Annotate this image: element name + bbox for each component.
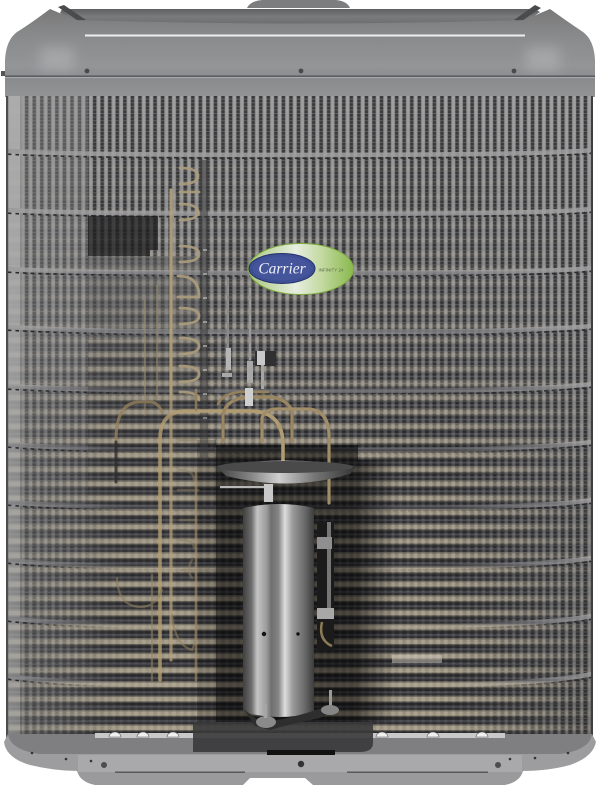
screws xyxy=(85,69,89,73)
horizontal bands xyxy=(8,150,592,686)
tagline: INFINITY 24 xyxy=(319,268,344,272)
blue oval xyxy=(249,254,315,284)
green oval xyxy=(248,244,354,294)
top cover xyxy=(1,0,595,97)
faint coil stripes over pipework xyxy=(100,400,215,700)
refrigerant pipework xyxy=(116,168,329,680)
cap body xyxy=(5,9,595,97)
compressor pan xyxy=(193,722,373,752)
hairpin coil column xyxy=(178,168,199,412)
foot rail xyxy=(77,771,523,785)
vertical tall pipe xyxy=(169,190,173,660)
tray floor xyxy=(8,734,592,754)
main copper loop xyxy=(160,411,283,680)
side rails xyxy=(6,96,8,744)
top lid xyxy=(60,9,540,24)
compressor feet xyxy=(243,708,332,730)
mounting plate xyxy=(216,460,356,484)
base xyxy=(4,690,596,785)
accumulator xyxy=(317,522,334,650)
vent cap xyxy=(247,0,350,8)
Carrier logo badge xyxy=(248,244,354,294)
drain notches xyxy=(109,732,488,737)
secondary loops xyxy=(116,402,162,440)
dark control box xyxy=(88,216,158,256)
dark interior box xyxy=(216,445,358,722)
louvre slits xyxy=(22,96,592,740)
compressor xyxy=(216,460,356,717)
translucent left panel xyxy=(8,96,88,736)
divider ticks xyxy=(203,250,207,418)
wordmark: Carrier xyxy=(258,260,307,278)
tray lip highlight xyxy=(95,733,505,738)
service valves xyxy=(222,278,276,406)
condenser coil stripes xyxy=(8,172,591,734)
vertical divider strip xyxy=(200,160,208,460)
light plate xyxy=(392,655,442,663)
faint slits over coils xyxy=(22,96,592,740)
bolts xyxy=(101,762,107,768)
corner rim xyxy=(4,734,596,771)
compressor body xyxy=(243,504,314,717)
